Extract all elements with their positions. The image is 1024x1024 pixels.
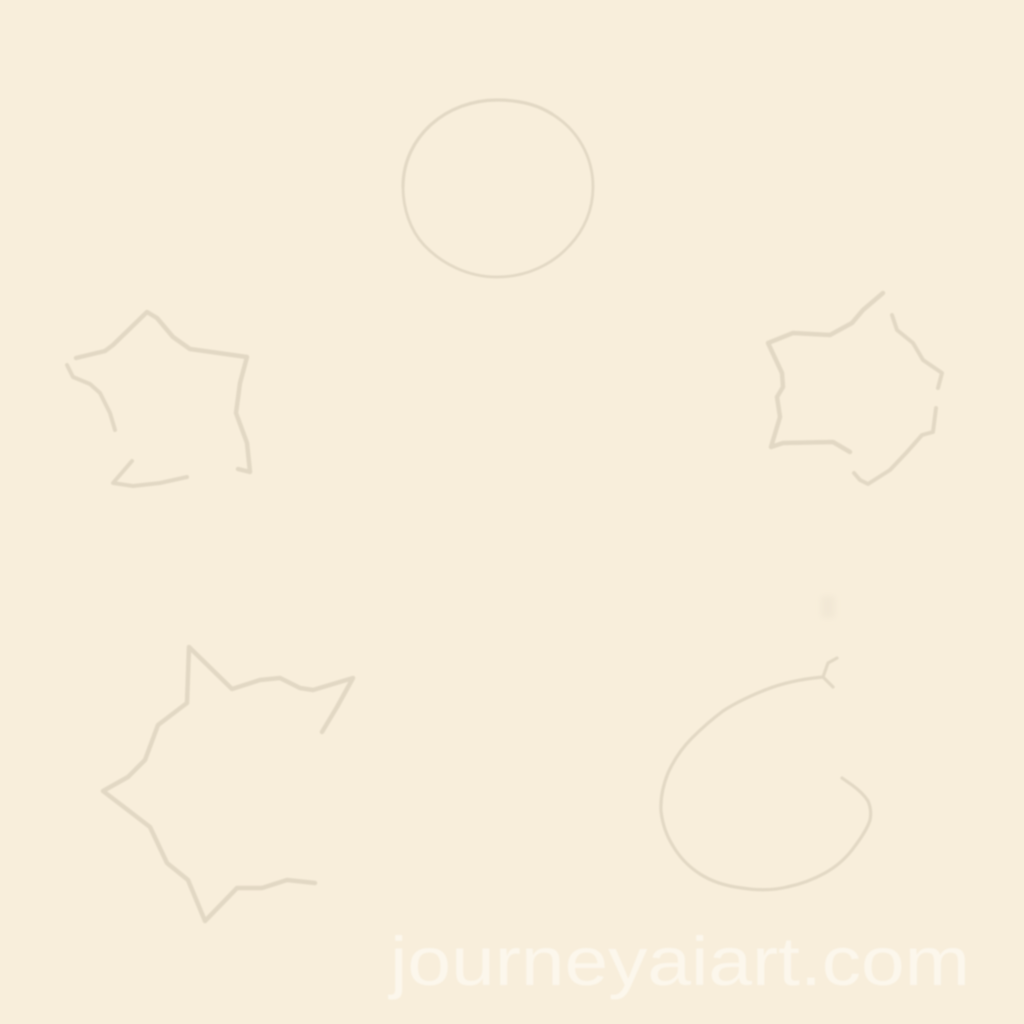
icon: sketched star shape, left bbox=[67, 312, 250, 486]
icon: sketched open curve, bottom right bbox=[661, 658, 871, 890]
icon: sketched spiky shape, bottom left bbox=[103, 647, 353, 921]
icon: sketched spiky shape, right bbox=[768, 293, 942, 484]
watermark: journeyaiart.com bbox=[388, 923, 970, 1000]
icon: sketched circle bbox=[403, 100, 593, 277]
